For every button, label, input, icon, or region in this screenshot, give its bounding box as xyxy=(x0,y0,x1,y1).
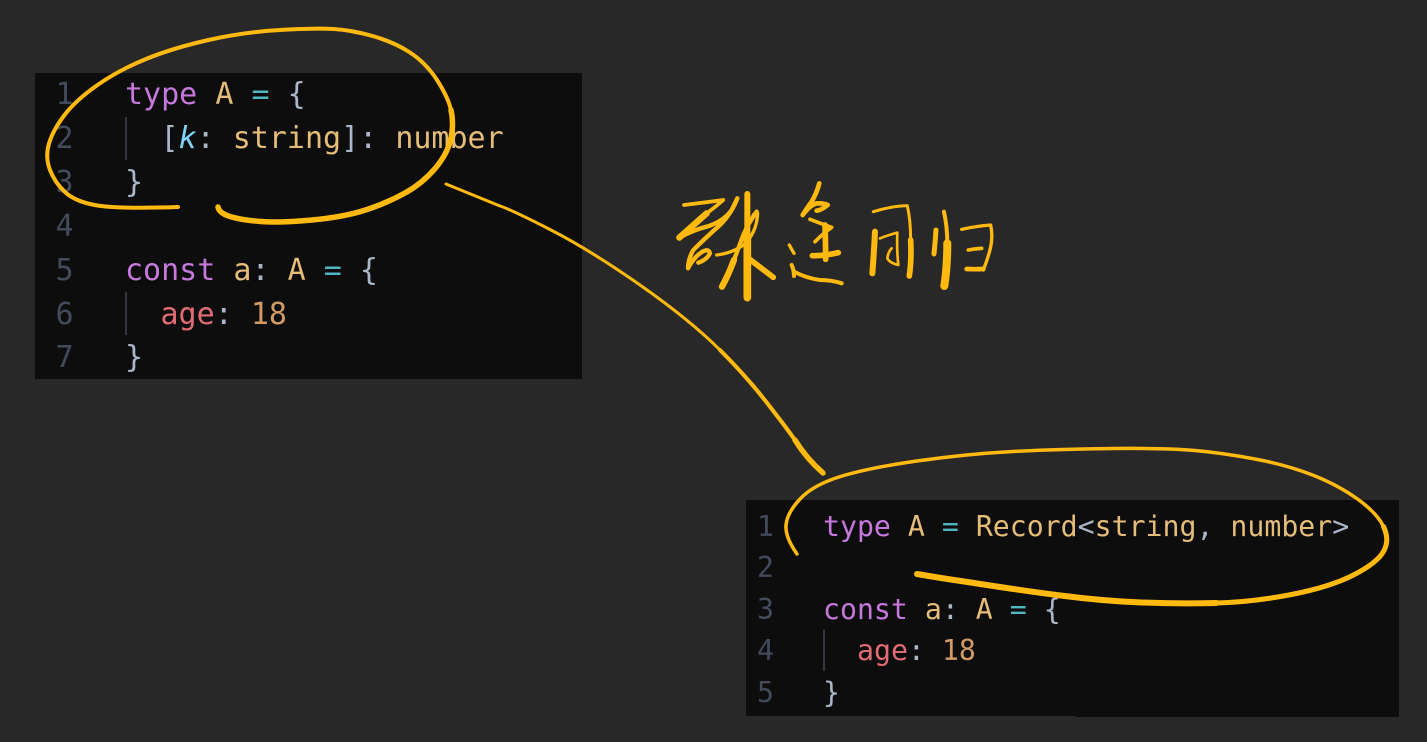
code: type A with index signature: const a: A = { xyxy=(125,253,378,288)
handwritten character 3 xyxy=(872,206,911,276)
code: type A as Record: } xyxy=(823,676,840,709)
line numbers 1 to 5: 2 xyxy=(757,551,774,584)
line numbers 1 to 7: 7 xyxy=(56,340,74,375)
line numbers 1 to 7: 4 xyxy=(56,209,74,244)
code: type A as Record: const a: A = { xyxy=(823,593,1061,626)
line numbers 1 to 7: 1 xyxy=(56,77,74,112)
panel: code block with Record type xyxy=(746,500,1399,717)
line numbers 1 to 7 xyxy=(56,77,74,375)
line numbers 1 to 7: 2 xyxy=(56,121,74,156)
handwritten character 1 xyxy=(679,194,773,298)
line numbers 1 to 5: 3 xyxy=(757,593,774,626)
line numbers 1 to 5: 4 xyxy=(757,634,774,667)
code: type A with index signature: type A = { xyxy=(125,77,306,112)
handwritten title: 殊途同归 xyxy=(679,183,992,298)
line numbers 1 to 5: 1 xyxy=(757,510,774,543)
code: type A as Record: age: 18 xyxy=(857,634,976,667)
line numbers 1 to 7: 5 xyxy=(56,253,74,288)
line numbers 1 to 7: 6 xyxy=(56,297,74,332)
handwritten character 4 xyxy=(934,212,992,286)
code: type A with index signature xyxy=(125,77,504,375)
code: type A with index signature: [k: string]: number xyxy=(160,121,504,156)
line numbers 1 to 5: 5 xyxy=(757,676,774,709)
code: type A as Record xyxy=(823,510,1349,709)
code: type A with index signature: } xyxy=(125,165,143,200)
hand-drawn circle around Record line xyxy=(786,448,1387,603)
line numbers 1 to 5 xyxy=(757,510,774,709)
code: type A with index signature: } xyxy=(125,340,143,375)
hand-drawn circle around index signature xyxy=(47,29,452,222)
panel: code block with index signature xyxy=(35,73,582,379)
connector line between the two code blocks xyxy=(446,184,823,473)
handwritten character 2 xyxy=(789,183,842,283)
line numbers 1 to 7: 3 xyxy=(56,165,74,200)
code: type A with index signature: age: 18 xyxy=(160,297,287,332)
code: type A as Record: type A = Record<string, number> xyxy=(823,510,1349,543)
